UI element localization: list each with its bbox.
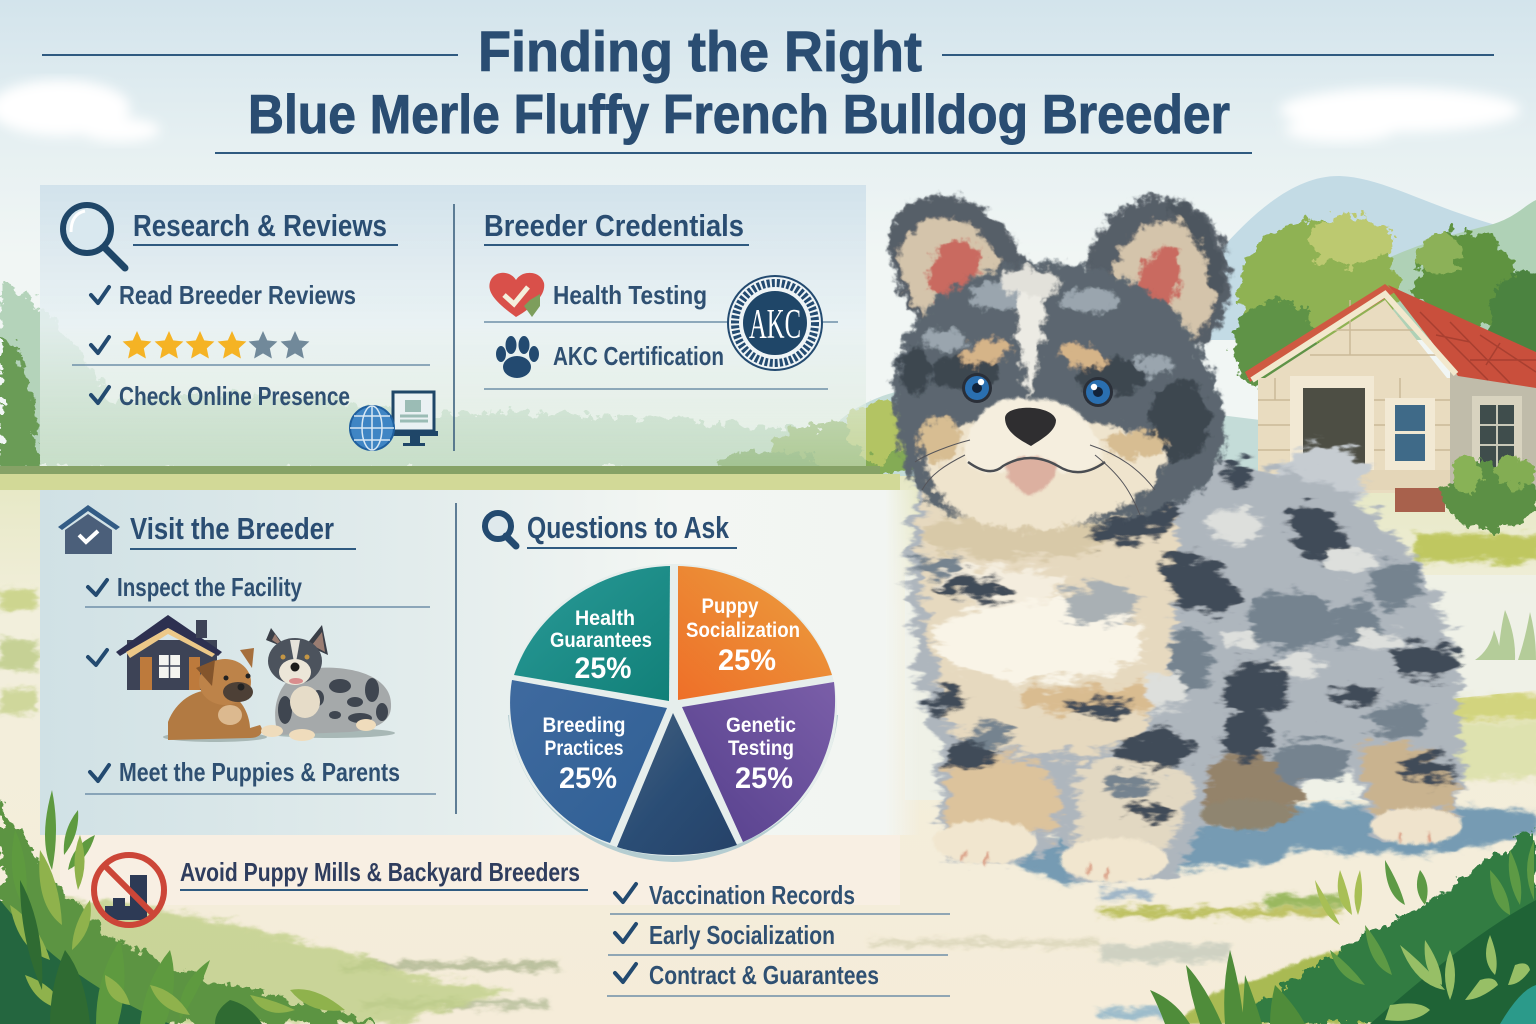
panel: questions to ask [485, 510, 838, 862]
pie label: breeding practices [542, 714, 626, 795]
item: read breeder reviews: Read Breeder Reviews [119, 280, 356, 310]
icon: magnifying glass [63, 205, 125, 268]
dog head [894, 262, 1225, 530]
illustration: brown puppy [163, 648, 267, 742]
pie label: puppy socialization: Socialization [686, 619, 800, 642]
pie label: puppy socialization: Puppy [702, 595, 759, 618]
heading: research and reviews: Research & Reviews [133, 208, 387, 243]
icon: paw print [496, 336, 539, 378]
heading: questions to ask: Questions to Ask [527, 510, 730, 545]
item: meet the puppies and parents: Meet the Puppies & Parents [119, 757, 400, 787]
badge: AKC seal: AKC [749, 302, 801, 348]
pie label: health guarantees [550, 607, 652, 685]
rating stars [91, 331, 309, 358]
heading: visit the breeder: Visit the Breeder [130, 511, 334, 546]
house [1245, 284, 1536, 512]
foreground foliage: right [1150, 830, 1536, 1024]
title: Blue Merle Fluffy French Bulldog Breeder [248, 83, 1230, 145]
dog left eye [962, 373, 992, 403]
panel: research and credentials backdrop [40, 185, 866, 466]
pie label: puppy socialization: 25% [718, 644, 776, 677]
hero puppy [890, 195, 1462, 882]
title: Finding the Right [478, 20, 922, 84]
pie label: breeding practices: 25% [559, 762, 617, 795]
pie label: genetic testing [726, 714, 796, 795]
item: early socialization: Early Socialization [649, 920, 835, 950]
panel: visit and questions backdrop [40, 490, 920, 835]
bush by house [1442, 455, 1536, 529]
icon: monitor and globe [350, 392, 438, 450]
pie label: genetic testing: 25% [735, 762, 793, 795]
item: inspect the facility: Inspect the Facility [117, 572, 302, 602]
warning text: Avoid Puppy Mills & Backyard Breeders [180, 857, 580, 887]
panel: breeder credentials [484, 208, 838, 389]
pie label: health guarantees: 25% [574, 652, 632, 685]
title [42, 20, 1494, 153]
illustration: house [116, 615, 222, 690]
heading: breeder credentials: Breeder Credentials [484, 208, 744, 243]
item: check online presence: Check Online Presence [119, 381, 350, 411]
item: vaccination records: Vaccination Records [649, 880, 855, 910]
panel: research and reviews [63, 205, 438, 450]
item: akc certification: AKC Certification [553, 341, 724, 371]
item: contract and guarantees: Contract & Guarantees [649, 960, 879, 990]
icon: no factory [94, 855, 164, 925]
panel: visit the breeder [58, 505, 436, 794]
pie label: breeding practices: Practices [544, 737, 624, 760]
pie label: health guarantees: Health [575, 607, 635, 630]
pie chart [508, 564, 838, 862]
icon: small magnifier [485, 513, 516, 546]
dog paws [933, 799, 1462, 882]
item: health testing: Health Testing [553, 280, 707, 310]
pie label: breeding practices: Breeding [542, 714, 626, 737]
dog body, legs and merle coat [908, 446, 1462, 880]
dog whiskers [915, 440, 1155, 515]
foreground foliage: left [0, 790, 510, 1024]
dog nose [1005, 408, 1056, 446]
icon: heart check [489, 273, 544, 317]
badge: AKC seal [728, 276, 822, 370]
checklist [607, 880, 950, 996]
pie label: puppy socialization [686, 595, 800, 677]
pie label: health guarantees: Guarantees [550, 629, 652, 652]
dog ears [890, 195, 1230, 351]
dog right eye [1083, 377, 1113, 407]
pie label: genetic testing: Testing [728, 737, 794, 760]
icon: house check [58, 505, 120, 554]
warning: avoid puppy mills [94, 855, 588, 925]
ground shadow under puppy [1000, 800, 1536, 885]
dog muzzle [965, 398, 1102, 495]
pie label: genetic testing: Genetic [726, 714, 796, 737]
illustration: merle puppy [261, 625, 395, 741]
plant accent right [1475, 610, 1536, 660]
panel: avoid and checklist backdrop [60, 835, 900, 905]
